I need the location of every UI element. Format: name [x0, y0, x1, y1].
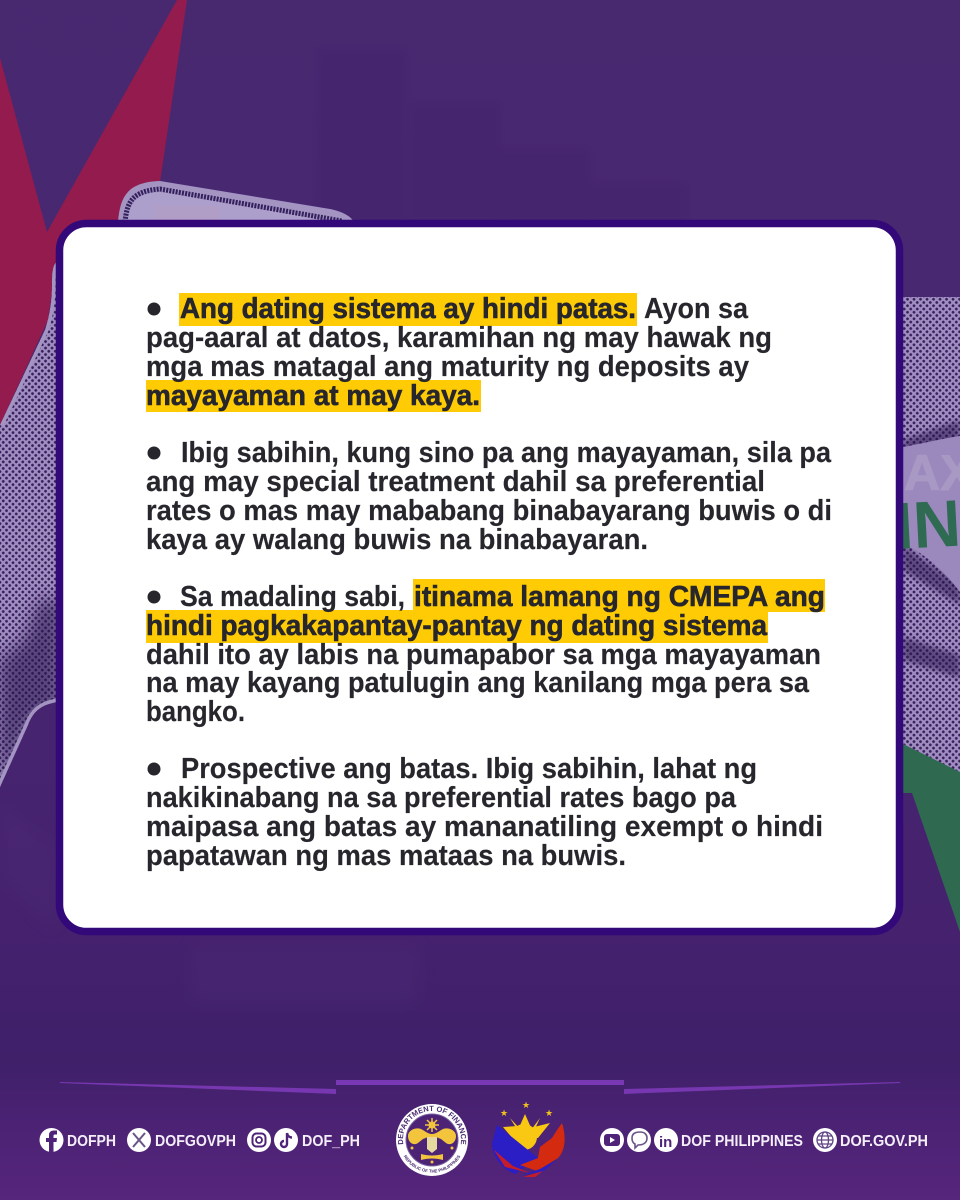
- social: youtube, viber, linkedin: [600, 1128, 803, 1152]
- paragraph 1: mga mas matagal ang maturity ng deposits ay: [146, 351, 749, 383]
- flag stars: ★: [545, 1109, 553, 1119]
- wallet top edge: [118, 181, 354, 222]
- highlights: [146, 293, 825, 643]
- wallet dotted outline: [125, 189, 342, 222]
- paragraph 3: dahil ito ay labis na pumapabor sa mga mayayaman: [146, 639, 821, 671]
- social: website: DOF.GOV.PH: [840, 1133, 928, 1150]
- flag stars: ★: [522, 1101, 530, 1111]
- paragraph 4: maipasa ang batas ay mananatiling exempt o hindi: [146, 811, 823, 843]
- right label lettering: [903, 455, 960, 549]
- paragraph 1: Ayon sa: [644, 293, 749, 325]
- paragraph 1: [146, 293, 772, 412]
- paragraph 4: papatawan ng mas mataas na buwis.: [146, 840, 626, 872]
- paragraph 3: bangko.: [146, 696, 245, 728]
- flag sun: [503, 1114, 550, 1150]
- right label panel: [903, 436, 960, 592]
- red shape left: [0, 0, 187, 425]
- paragraph 4: Prospective ang batas. Ibig sabihin, lahat ng: [181, 753, 757, 785]
- social: instagram and tiktok: DOF_PH: [302, 1133, 360, 1150]
- flag stars: ★: [500, 1109, 508, 1119]
- social: x: DOFGOVPH: [155, 1133, 236, 1150]
- right halftone wallet: [903, 297, 960, 772]
- paragraph 3: hindi pagkakapantay-pantay ng dating sistema: [146, 610, 768, 642]
- social: website: [813, 1128, 928, 1152]
- flag blue band: [492, 1125, 538, 1174]
- paragraph 1: pag-aaral at datos, karamihan ng may hawak ng: [146, 322, 772, 354]
- social: instagram and tiktok: [247, 1128, 360, 1152]
- paragraph 2: [146, 437, 832, 556]
- paragraph 3: itinama lamang ng CMEPA ang: [414, 581, 825, 613]
- social: facebook: [40, 1128, 116, 1152]
- wallet inner panel: [128, 192, 336, 222]
- paragraph 2: Ibig sabihin, kung sino pa ang mayayaman, sila pa: [181, 437, 832, 469]
- wallet faint pink mark: [155, 206, 220, 222]
- social: youtube, viber, linkedin: DOF PHILIPPINES: [681, 1133, 803, 1150]
- left halftone wallet: [0, 260, 60, 790]
- social: x: [127, 1128, 236, 1152]
- flag red band: [520, 1123, 565, 1171]
- footer divider lines: [60, 1080, 900, 1094]
- flag stars: [500, 1101, 553, 1119]
- paragraph 4: [146, 753, 823, 872]
- social: youtube, viber, linkedin: in: [659, 1134, 672, 1151]
- paragraph 2: ang may special treatment dahil sa preferential: [146, 466, 765, 498]
- left lavender rim: [0, 262, 57, 787]
- background: faded coin stacks: [318, 50, 685, 222]
- background: faded lower shapes: [0, 800, 420, 1005]
- paragraph 3: na may kayang patulugin ang kanilang mga pera sa: [146, 667, 810, 699]
- logo: philippine flag globe: [492, 1101, 565, 1177]
- green shape right: [903, 744, 960, 932]
- seal emblem: [408, 1118, 456, 1164]
- paragraph 2: rates o mas may mababang binabayarang buwis o di: [146, 495, 832, 527]
- paragraph 3: Sa madaling sabi,: [180, 581, 405, 613]
- paragraph 2: kaya ay walang buwis na binabayaran.: [146, 524, 648, 556]
- flag lower bands: [494, 1150, 530, 1173]
- seal: department of finance: [396, 1104, 468, 1176]
- left halftone shading: [0, 600, 60, 790]
- background: dotted texture: [0, 0, 180, 230]
- seal text: REPUBLIC OF THE PHILIPPINES: [404, 1154, 460, 1173]
- card: [60, 224, 900, 932]
- seal text: [398, 1106, 466, 1173]
- seal text: DEPARTMENT OF FINANCE: [398, 1106, 466, 1144]
- paragraph 3: [146, 581, 825, 728]
- paragraph 1: Ang dating sistema ay hindi patas.: [180, 293, 636, 325]
- paragraph 4: nakikinabang na sa preferential rates bago pa: [146, 782, 737, 814]
- social: facebook: DOFPH: [67, 1133, 116, 1150]
- paragraph 1: mayayaman at may kaya.: [146, 380, 480, 412]
- right halftone dark bands: [903, 420, 960, 678]
